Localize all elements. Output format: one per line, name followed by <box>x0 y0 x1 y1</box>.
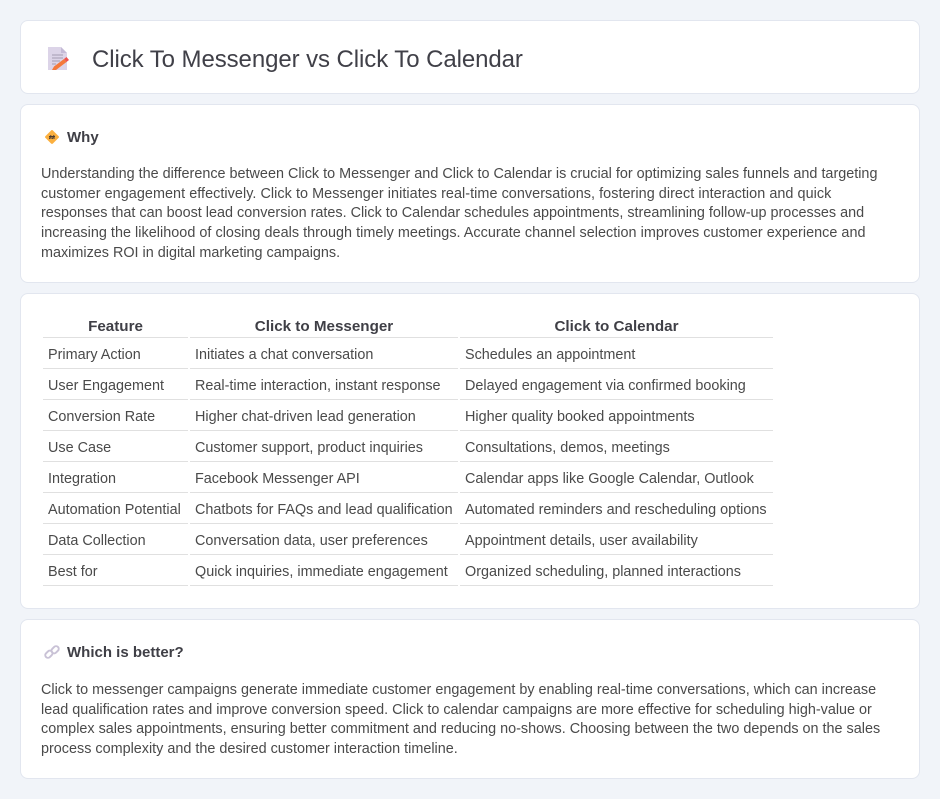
comparison table: Higher quality booked appointments <box>465 409 695 425</box>
text block: which is better: lead qualification rates and improve conversion speed. Click to calendar campaigns are more effective for scheduling high-value or <box>41 702 872 718</box>
panel: which is better <box>20 619 920 779</box>
panel: title header <box>20 20 920 94</box>
comparison table: Consultations, demos, meetings <box>465 440 670 456</box>
comparison table: Quick inquiries, immediate engagement <box>195 564 448 580</box>
text block: why: customer engagement effectively. Click to Messenger initiates real-time conversations, fostering direct interaction and quick <box>41 186 831 202</box>
comparison table: Real-time interaction, instant response <box>195 378 441 394</box>
title: Click To Messenger vs Click To Calendar <box>92 46 523 73</box>
heading: why: Why <box>67 129 99 146</box>
text block: why: maximizes ROI in digital marketing campaigns. <box>41 245 340 261</box>
comparison table: Automation Potential <box>48 502 181 518</box>
comparison table: Initiates a chat conversation <box>195 347 373 363</box>
icon: warning diamond <box>45 130 59 144</box>
comparison table <box>43 318 773 586</box>
comparison table: Delayed engagement via confirmed booking <box>465 378 746 394</box>
comparison table: Primary Action <box>48 347 141 363</box>
comparison table: Integration <box>48 471 116 487</box>
comparison table: Facebook Messenger API <box>195 471 360 487</box>
comparison table: Best for <box>48 564 98 580</box>
text block: which is better <box>41 682 880 757</box>
comparison table: User Engagement <box>48 378 164 394</box>
comparison table: Click to Calendar <box>554 318 679 335</box>
comparison table: Organized scheduling, planned interactions <box>465 564 741 580</box>
comparison table: Chatbots for FAQs and lead qualification <box>195 502 453 518</box>
comparison table: Appointment details, user availability <box>465 533 698 549</box>
comparison table: Customer support, product inquiries <box>195 440 423 456</box>
comparison table: Click to Messenger <box>255 318 393 335</box>
heading: which is better: Which is better? <box>67 644 184 661</box>
text block: which is better: process complexity and the desired customer interaction timeline. <box>41 741 458 757</box>
panel: comparison table <box>20 293 920 609</box>
text block: why <box>41 166 877 261</box>
text block: which is better: Click to messenger campaigns generate immediate customer engagement by enabling real-time conversations, which can increase <box>41 682 876 698</box>
icon: chain link <box>44 645 60 659</box>
text block: why: Understanding the difference between Click to Messenger and Click to Calendar is crucial for optimizing sales funnels and targeting <box>41 166 877 182</box>
comparison table: Conversation data, user preferences <box>195 533 428 549</box>
comparison table: Automated reminders and rescheduling options <box>465 502 767 518</box>
comparison table: Schedules an appointment <box>465 347 635 363</box>
comparison table: Use Case <box>48 440 111 456</box>
text block: which is better: complex sales appointments, ensuring better commitment and reducing no-shows. Choosing between the two depends on the sales <box>41 721 880 737</box>
icon: document with pencil <box>48 47 69 70</box>
comparison table: Feature <box>88 318 143 335</box>
panel: why <box>20 104 920 283</box>
comparison table: Higher chat-driven lead generation <box>195 409 416 425</box>
text block: why: responses that can boost lead conversion rates. Click to Calendar schedules appointments, streamlining follow-up processes and <box>41 205 864 221</box>
comparison table: Data Collection <box>48 533 146 549</box>
text block: why: increasing the likelihood of closing deals through timely meetings. Accurate channel selection improves customer experience and <box>41 225 866 241</box>
comparison table: Calendar apps like Google Calendar, Outlook <box>465 471 754 487</box>
comparison table: Conversion Rate <box>48 409 155 425</box>
